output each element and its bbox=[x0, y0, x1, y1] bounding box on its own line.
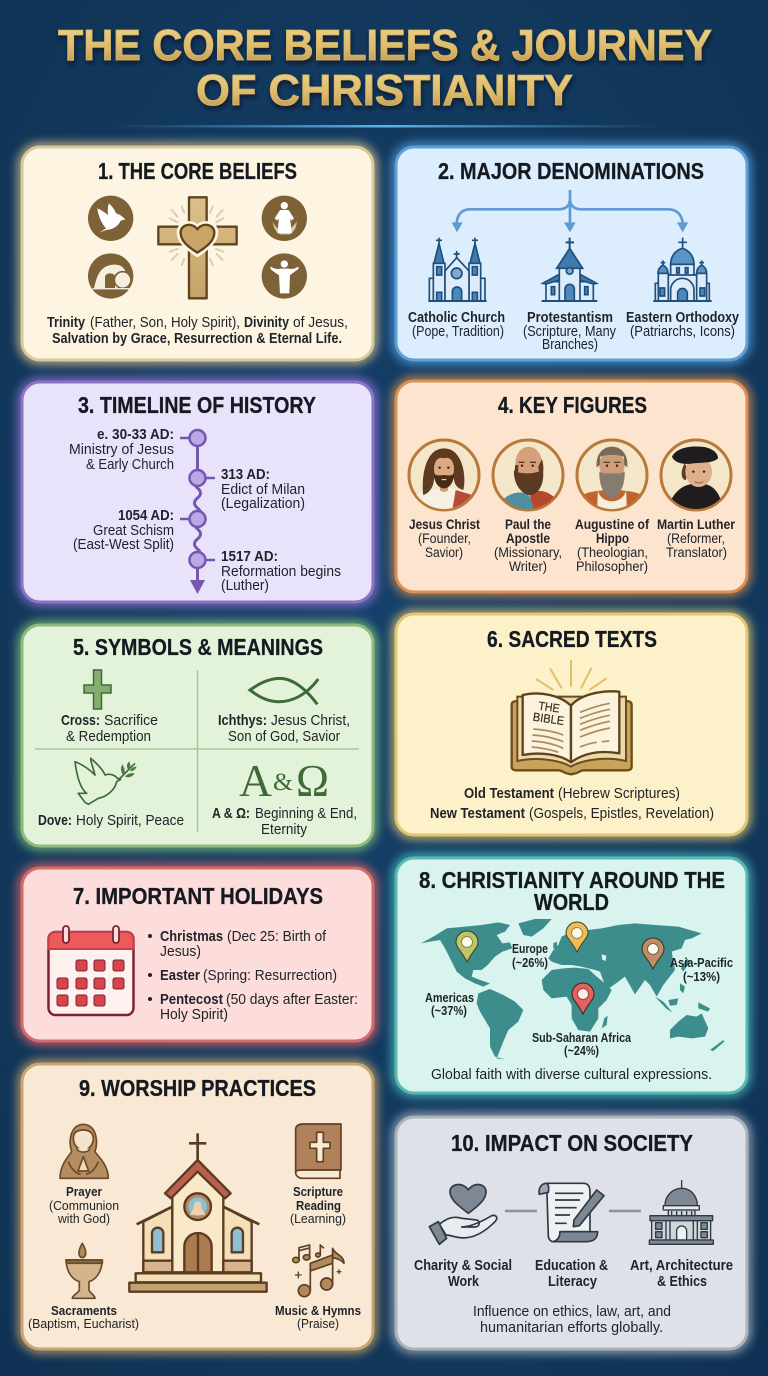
label: europe: Europe bbox=[512, 942, 548, 956]
label: europe: (~26%) bbox=[512, 956, 548, 970]
label: asia-pacific: (~13%) bbox=[683, 970, 720, 984]
label: music and hymns: (Praise) bbox=[297, 1316, 339, 1331]
label: sacraments bbox=[28, 1303, 139, 1331]
label: protestantism: Protestantism bbox=[527, 310, 613, 326]
event: 1054 AD: Great Schism bbox=[93, 523, 174, 539]
event: 1054 AD: (East-West Split) bbox=[73, 537, 174, 553]
portrait: paul the apostle bbox=[493, 440, 563, 512]
icon: heart and hand bbox=[429, 1185, 497, 1244]
title bbox=[58, 21, 712, 115]
label: eastern orthodoxy: (Patriarchs, Icons) bbox=[630, 324, 735, 340]
label: prayer bbox=[49, 1184, 119, 1226]
summary text bbox=[47, 315, 348, 347]
label: sacraments: (Baptism, Eucharist) bbox=[28, 1316, 139, 1331]
label: augustine of hippo: Philosopher) bbox=[576, 559, 648, 574]
event: 313 AD: (Legalization) bbox=[221, 496, 305, 512]
event: 313 AD: 313 AD: bbox=[221, 467, 270, 483]
label: scripture reading: (Learning) bbox=[290, 1211, 346, 1226]
label: protestantism: (Scripture, Many bbox=[523, 324, 617, 340]
list: holidays: (50 days after Easter: bbox=[226, 992, 358, 1008]
title: THE CORE BELIEFS & JOURNEY bbox=[58, 21, 712, 70]
icon: praying figure bbox=[60, 1124, 108, 1178]
icon: open bible with rays bbox=[512, 660, 632, 774]
label: alpha and omega: Beginning & End, bbox=[255, 805, 357, 822]
icon: dove bbox=[88, 196, 133, 241]
event: 1054 AD bbox=[73, 508, 174, 553]
heading: 1. THE CORE BELIEFS bbox=[98, 158, 297, 184]
heading: WORLD bbox=[534, 889, 609, 915]
event: 1517 AD: Reformation begins bbox=[221, 564, 341, 580]
heading: 2. MAJOR DENOMINATIONS bbox=[438, 158, 704, 184]
label: sacraments: Sacraments bbox=[51, 1303, 117, 1318]
label: art bbox=[630, 1258, 733, 1290]
summary text: humanitarian efforts globally. bbox=[480, 1320, 663, 1336]
label: martin luther: (Reformer, bbox=[667, 531, 725, 546]
panel: 7. important holidays bbox=[22, 868, 373, 1041]
list: holidays bbox=[148, 929, 358, 1023]
event: 30-33 AD bbox=[69, 427, 174, 473]
label: music and hymns: Music & Hymns bbox=[275, 1303, 361, 1318]
icon: protestant church bbox=[542, 238, 597, 301]
label: jesus christ: Savior) bbox=[425, 545, 463, 560]
heading: 3. TIMELINE OF HISTORY bbox=[78, 392, 316, 418]
label: martin luther: Martin Luther bbox=[657, 517, 736, 532]
icon: orthodox church bbox=[653, 238, 712, 301]
heading: 5. SYMBOLS & MEANINGS bbox=[73, 634, 323, 660]
label: music and hymns bbox=[275, 1303, 361, 1331]
label: martin luther bbox=[657, 517, 736, 560]
label: ichthys bbox=[218, 712, 350, 745]
label: alpha and omega: A & Ω: bbox=[212, 805, 250, 822]
heading: 9. WORSHIP PRACTICES bbox=[79, 1075, 316, 1101]
label: dove bbox=[38, 812, 184, 829]
pin: americas bbox=[456, 931, 478, 962]
label: prayer: (Communion bbox=[49, 1198, 119, 1213]
label: americas: Americas bbox=[425, 991, 474, 1005]
list: holidays: Jesus) bbox=[160, 944, 201, 960]
summary text: Divinity bbox=[244, 315, 289, 331]
event: 1517 AD: 1517 AD: bbox=[221, 549, 278, 565]
portrait: martin luther bbox=[661, 440, 731, 512]
panel: 3. timeline of history bbox=[22, 382, 373, 602]
caption: Global faith with diverse cultural expressions. bbox=[431, 1067, 712, 1083]
label: cross: Cross: bbox=[61, 712, 100, 729]
icon: civic building bbox=[649, 1180, 713, 1244]
heading: 10. IMPACT ON SOCIETY bbox=[451, 1130, 693, 1156]
label: eastern orthodoxy: Eastern Orthodoxy bbox=[626, 310, 739, 326]
label: jesus christ: (Founder, bbox=[418, 531, 471, 546]
label: dove: Holy Spirit, Peace bbox=[76, 812, 184, 829]
icon: open bible with rays: BIBLE bbox=[532, 710, 565, 728]
list: holidays: Easter bbox=[160, 968, 200, 984]
label: protestantism bbox=[523, 310, 617, 353]
label: art: Art, Architecture bbox=[630, 1258, 733, 1274]
label: charity: Charity & Social bbox=[414, 1258, 512, 1274]
label: jesus christ bbox=[409, 517, 480, 560]
list: holidays: (Spring: Resurrection) bbox=[203, 968, 337, 984]
label: dove: Dove: bbox=[38, 812, 72, 829]
pin: europe bbox=[566, 922, 588, 952]
icon: open bible with rays: THE bbox=[538, 699, 561, 716]
summary text: of Jesus, bbox=[293, 315, 348, 331]
label: martin luther: Translator) bbox=[666, 545, 727, 560]
text: testaments: (Gospels, Epistles, Revelation) bbox=[529, 806, 714, 822]
label: charity: Work bbox=[448, 1274, 480, 1290]
panel: 1. the core beliefs bbox=[22, 147, 373, 360]
panel: 5. symbols and meanings bbox=[22, 625, 373, 846]
label: eastern orthodoxy bbox=[626, 310, 739, 340]
heading: 7. IMPORTANT HOLIDAYS bbox=[73, 883, 323, 909]
icon: alpha and omega: & bbox=[273, 769, 293, 796]
label: paul the apostle: (Missionary, bbox=[494, 545, 562, 560]
event: 30-33 AD: Ministry of Jesus bbox=[69, 442, 174, 458]
heading: 8. CHRISTIANITY AROUND THE bbox=[419, 867, 725, 893]
label: ichthys: Ichthys: bbox=[218, 712, 267, 729]
list: holidays: Pentecost bbox=[160, 992, 223, 1008]
text: testaments: Old Testament bbox=[464, 786, 554, 802]
label: art: & Ethics bbox=[657, 1274, 707, 1290]
pin: sub-saharan africa bbox=[572, 983, 594, 1014]
label: alpha and omega: Eternity bbox=[261, 821, 307, 838]
icon: alpha and omega: Ω bbox=[296, 755, 329, 806]
label: americas: (~37%) bbox=[431, 1004, 467, 1018]
panel: 6. sacred texts bbox=[396, 614, 747, 835]
timeline nodes bbox=[190, 430, 206, 568]
icon: tomb bbox=[88, 253, 133, 299]
label: jesus christ: Jesus Christ bbox=[409, 517, 480, 532]
label: catholic church: (Pope, Tradition) bbox=[412, 324, 504, 340]
icon: cross bbox=[84, 670, 111, 709]
label: augustine of hippo: (Theologian, bbox=[577, 545, 648, 560]
icon: risen christ bbox=[262, 196, 307, 241]
label: paul the apostle: Paul the bbox=[505, 517, 551, 532]
panel: 8. christianity around the world bbox=[396, 858, 747, 1093]
panel: 9. worship practices bbox=[22, 1064, 373, 1349]
label: sub-saharan africa: Sub-Saharan Africa bbox=[532, 1031, 632, 1045]
text: testaments: New Testament bbox=[430, 806, 525, 822]
label: prayer: with God) bbox=[57, 1211, 110, 1226]
icon: church bbox=[129, 1133, 267, 1292]
event: 1517 AD: (Luther) bbox=[221, 578, 269, 594]
heading: 4. KEY FIGURES bbox=[498, 392, 647, 418]
label: scripture reading: Reading bbox=[296, 1198, 341, 1213]
label: sub-saharan africa: (~24%) bbox=[564, 1044, 599, 1058]
icon: cross and heart bbox=[158, 197, 237, 298]
icon: ichthys bbox=[250, 678, 318, 704]
panel: 2. major denominations bbox=[396, 147, 747, 360]
icon: dove with olive branch bbox=[75, 758, 137, 804]
list: holidays: Holy Spirit) bbox=[160, 1007, 228, 1023]
label: education: Education & bbox=[535, 1258, 608, 1274]
label: asia-pacific: Asia-Pacific bbox=[670, 956, 733, 970]
list: holidays: (Dec 25: Birth of bbox=[227, 929, 327, 945]
summary text: Salvation by Grace, Resurrection & Eternal Life. bbox=[52, 331, 342, 347]
event: 1054 AD: 1054 AD: bbox=[118, 508, 174, 524]
label: augustine of hippo: Augustine of bbox=[575, 517, 649, 532]
icon: bible bbox=[296, 1124, 341, 1178]
label: paul the apostle bbox=[494, 517, 562, 574]
label: paul the apostle: Apostle bbox=[506, 531, 550, 546]
label: charity bbox=[414, 1258, 512, 1290]
heading: 6. SACRED TEXTS bbox=[487, 626, 657, 652]
summary text bbox=[473, 1304, 671, 1336]
label: paul the apostle: Writer) bbox=[509, 559, 547, 574]
list: holidays: Christmas bbox=[160, 929, 223, 945]
label: augustine of hippo: Hippo bbox=[596, 531, 629, 546]
label: catholic church bbox=[408, 310, 505, 340]
icon: musical notes bbox=[293, 1245, 344, 1297]
text: testaments: (Hebrew Scriptures) bbox=[558, 786, 680, 802]
label: europe bbox=[512, 942, 548, 970]
event: 30-33 AD: & Early Church bbox=[86, 457, 174, 473]
connector lines bbox=[505, 1210, 641, 1212]
event: 30-33 AD: e. 30-33 AD: bbox=[97, 427, 174, 443]
timeline axis bbox=[180, 430, 215, 594]
icon: alpha and omega: A bbox=[239, 755, 272, 806]
label: education bbox=[535, 1258, 608, 1290]
label: protestantism: Branches) bbox=[542, 337, 598, 353]
heading bbox=[419, 867, 725, 915]
icon: catholic cathedral bbox=[428, 238, 487, 301]
event: 313 AD bbox=[221, 467, 305, 512]
label: americas bbox=[425, 991, 474, 1018]
label: ichthys: Jesus Christ, bbox=[271, 712, 350, 729]
portrait: jesus christ bbox=[409, 440, 479, 512]
event: 1517 AD bbox=[221, 549, 341, 594]
pin: asia-pacific bbox=[642, 938, 664, 969]
label: cross: & Redemption bbox=[66, 728, 151, 745]
label: scripture reading bbox=[290, 1184, 346, 1226]
label: prayer: Prayer bbox=[66, 1184, 102, 1199]
summary text: (Father, Son, Holy Spirit), bbox=[90, 315, 240, 331]
label: alpha and omega bbox=[212, 805, 357, 838]
icon: alpha and omega bbox=[239, 755, 329, 806]
portrait: augustine of hippo bbox=[577, 440, 647, 512]
summary text: Trinity bbox=[47, 315, 85, 331]
label: catholic church: Catholic Church bbox=[408, 310, 505, 326]
summary text: Influence on ethics, law, art, and bbox=[473, 1304, 671, 1320]
label: cross bbox=[61, 712, 158, 745]
title: OF CHRISTIANITY bbox=[196, 66, 573, 115]
world map bbox=[421, 919, 724, 1059]
label: augustine of hippo bbox=[575, 517, 649, 574]
panel: 4. key figures bbox=[396, 381, 747, 592]
label: ichthys: Son of God, Savior bbox=[228, 728, 340, 745]
label: cross: Sacrifice bbox=[104, 712, 158, 729]
icon: chalice bbox=[66, 1243, 102, 1298]
label: education: Literacy bbox=[548, 1274, 597, 1290]
text: testaments bbox=[430, 786, 714, 822]
label: scripture reading: Scripture bbox=[293, 1184, 343, 1199]
label: asia-pacific bbox=[670, 956, 733, 984]
event: 313 AD: Edict of Milan bbox=[221, 482, 305, 498]
label: sub-saharan africa bbox=[532, 1031, 632, 1058]
panel: 10. impact on society bbox=[396, 1117, 747, 1349]
icon: scroll and quill bbox=[539, 1183, 604, 1242]
icon: calendar bbox=[48, 926, 134, 1015]
icon: figure with open arms bbox=[262, 253, 307, 299]
branching arrows bbox=[452, 190, 688, 232]
